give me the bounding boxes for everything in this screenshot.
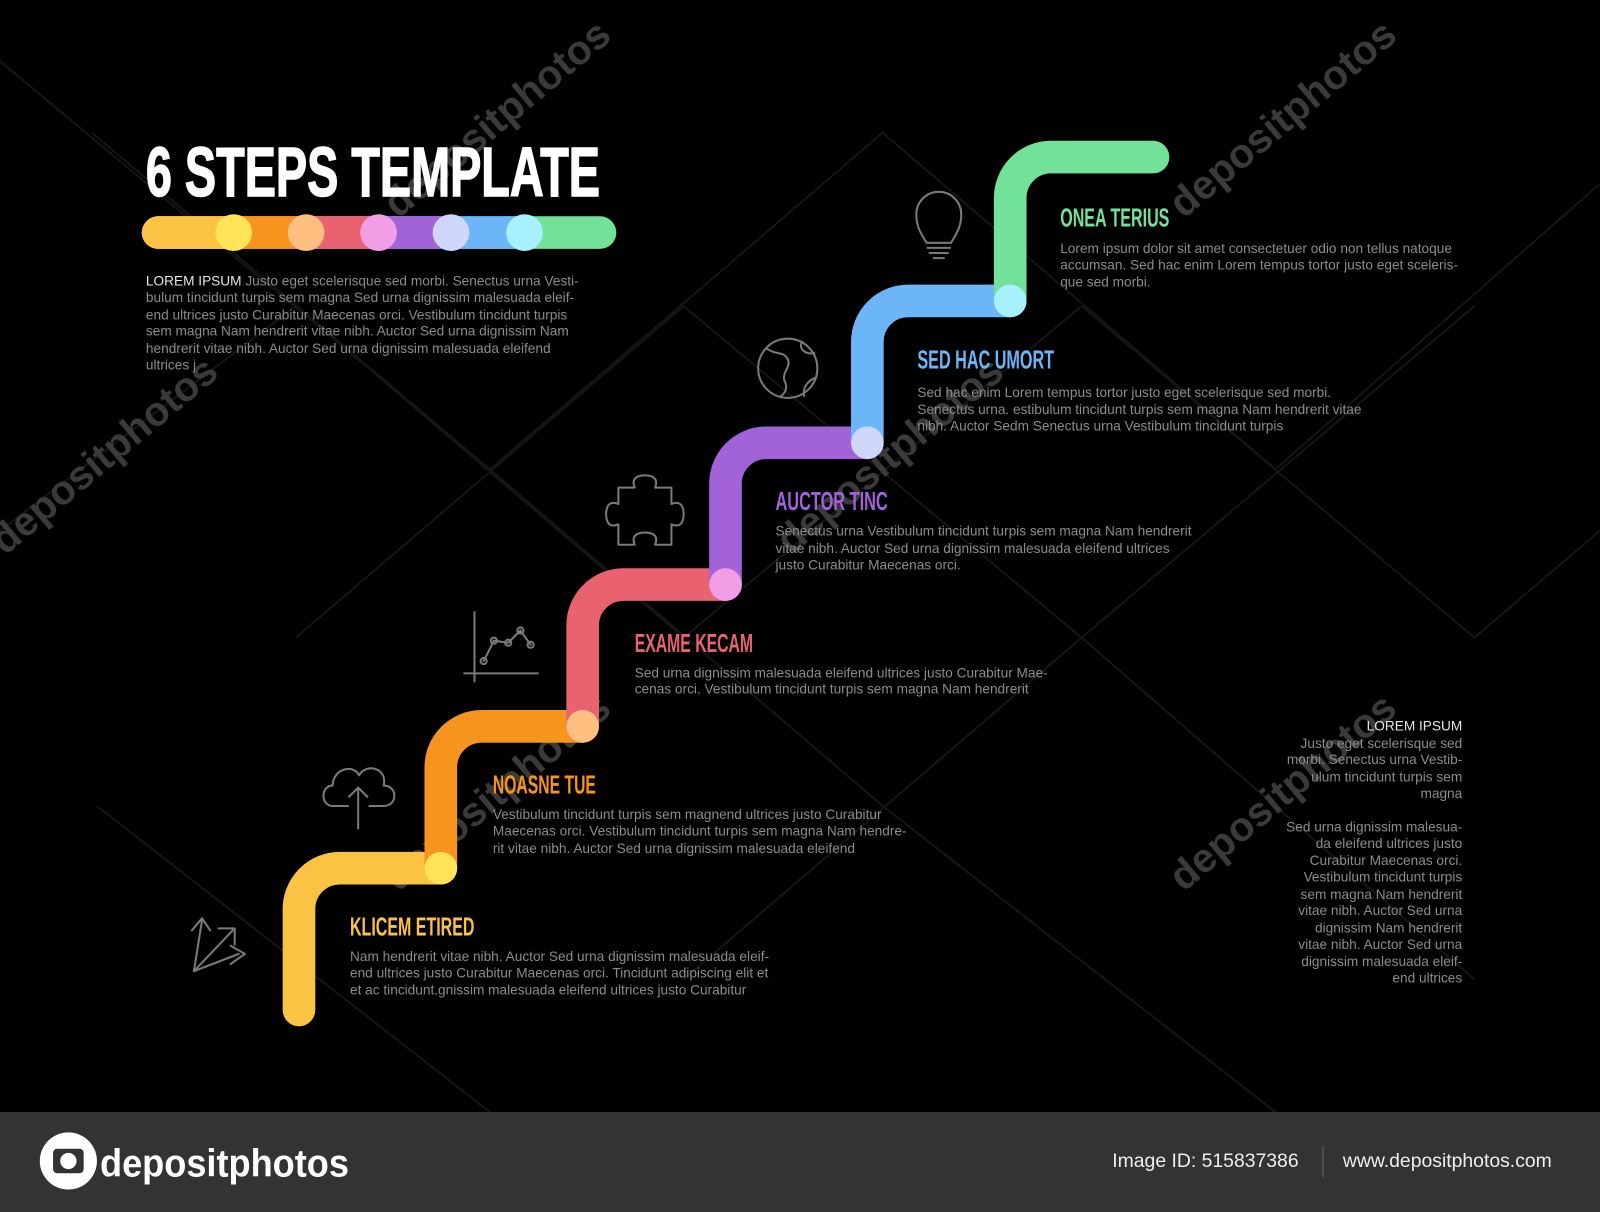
right text block: dignissim malesuada eleif- bbox=[1301, 954, 1462, 969]
text: depositphotos bbox=[1160, 684, 1405, 900]
step 6: ONEA TERIUS bbox=[1060, 204, 1169, 232]
text: depositphotos bbox=[374, 10, 619, 226]
footer bar: Image ID: 515837386 bbox=[1112, 1150, 1299, 1172]
icon: cloud upload bbox=[323, 768, 394, 828]
right text block: sem magna Nam hendrerit bbox=[1301, 887, 1462, 902]
right text block: da eleifend ultrices justo bbox=[1316, 836, 1463, 851]
intro text: bulum tincidunt turpis sem magna Sed urna dignissim malesuada eleif- bbox=[146, 290, 574, 305]
right text block: vitae nibh. Auctor Sed urna bbox=[1298, 903, 1463, 918]
icon: globe bbox=[758, 339, 817, 398]
step 4: Senectus urna Vestibulum tincidunt turpis sem magna Nam hendrerit bbox=[776, 524, 1192, 539]
step 3 bbox=[635, 630, 1048, 697]
intro text: end ultrices justo Curabitur Maecenas orci. Vestibulum tincidunt turpis bbox=[146, 307, 567, 322]
color bar bbox=[142, 214, 616, 251]
step 3: cenas orci. Vestibulum tincidunt turpis sem magna Nam hendrerit bbox=[635, 682, 1029, 697]
step 4: justo Curabitur Maecenas orci. bbox=[775, 557, 961, 572]
step 2: NOASNE TUE bbox=[493, 772, 596, 800]
step 5: nibh. Auctor Sedm Senectus urna Vestibulum tincidunt turpis bbox=[917, 419, 1283, 434]
step 5: SED HAC UMORT bbox=[917, 346, 1054, 374]
icon: lightbulb bbox=[916, 192, 961, 258]
step 1: KLICEM ETIRED bbox=[350, 914, 474, 942]
text: depositphotos bbox=[1160, 10, 1405, 226]
footer bar: depositphotos bbox=[100, 1142, 349, 1185]
right text block: ulum tincidunt turpis sem bbox=[1311, 769, 1462, 784]
step 4 bbox=[775, 488, 1192, 572]
right text block: vitae nibh. Auctor Sed urna bbox=[1298, 937, 1463, 952]
step 3: Sed urna dignissim malesuada eleifend ultrices justo Curabitur Mae- bbox=[635, 665, 1048, 680]
right text block: Sed urna dignissim malesua- bbox=[1286, 819, 1462, 834]
staircase bbox=[299, 157, 1153, 1010]
intro text: hendrerit vitae nibh. Auctor Sed urna dignissim malesuada eleifend bbox=[146, 341, 551, 356]
step 2: rit vitae nibh. Auctor Sed urna dignissim malesuada eleifend bbox=[493, 841, 855, 856]
step 6: Lorem ipsum dolor sit amet consectetuer odio non tellus natoque bbox=[1060, 241, 1452, 256]
intro text bbox=[146, 274, 579, 372]
text: depositphotos bbox=[767, 347, 1012, 563]
right text block: Curabitur Maecenas orci. bbox=[1310, 853, 1462, 868]
step 6: que sed morbi. bbox=[1060, 275, 1151, 290]
step 1: Nam hendrerit vitae nibh. Auctor Sed urna dignissim malesuada eleif- bbox=[350, 949, 769, 964]
step 1: et ac tincidunt.gnissim malesuada eleifend ultrices justo Curabitur bbox=[350, 983, 747, 998]
step 6: accumsan. Sed hac enim Lorem tempus tortor justo eget sceleris- bbox=[1060, 257, 1458, 272]
intro text: sem magna Nam hendrerit vitae nibh. Auctor Sed urna dignissim Nam bbox=[146, 324, 569, 339]
footer bar bbox=[0, 1112, 1600, 1212]
right text block: Vestibulum tincidunt turpis bbox=[1304, 869, 1462, 884]
step 5: Sed hac enim Lorem tempus tortor justo eget scelerisque sed morbi. bbox=[917, 385, 1331, 400]
right text block: morbi. Senectus urna Vestib- bbox=[1287, 752, 1462, 767]
right text block: dignissim Nam hendrerit bbox=[1315, 920, 1462, 935]
step 4: vitae nibh. Auctor Sed urna dignissim malesuada eleifend ultrices bbox=[776, 541, 1170, 556]
text: depositphotos bbox=[374, 684, 619, 900]
step 2: Vestibulum tincidunt turpis sem magnend ultrices justo Curabitur bbox=[493, 807, 882, 822]
icon: puzzle bbox=[606, 475, 684, 545]
intro text: LOREM IPSUM Justo eget scelerisque sed morbi. Senectus urna Vesti- bbox=[146, 274, 579, 289]
right text block: Justo eget scelerisque sed bbox=[1301, 736, 1462, 751]
step 4: AUCTOR TINC bbox=[776, 488, 888, 516]
title: 6 STEPS TEMPLATE bbox=[146, 133, 600, 211]
icon: chart bbox=[464, 612, 538, 681]
right text block: LOREM IPSUM bbox=[1367, 718, 1462, 733]
icon: arrows bbox=[192, 918, 245, 971]
step 1: end ultrices justo Curabitur Maecenas orci. Tincidunt adipiscing elit et bbox=[350, 965, 768, 980]
step 6 bbox=[1060, 204, 1458, 290]
right text block bbox=[1286, 718, 1463, 985]
footer bar: www.depositphotos.com bbox=[1342, 1150, 1552, 1172]
right text block: magna bbox=[1420, 786, 1463, 801]
step 3: EXAME KECAM bbox=[635, 630, 753, 658]
step 2 bbox=[493, 772, 907, 856]
step 5 bbox=[917, 346, 1361, 434]
step 1 bbox=[350, 914, 769, 998]
step 5: Senectus urna. estibulum tincidunt turpis sem magna Nam hendrerit vitae bbox=[917, 402, 1361, 417]
intro text: ultrices j bbox=[146, 357, 196, 372]
right text block: end ultrices bbox=[1392, 970, 1462, 985]
step 2: Maecenas orci. Vestibulum tincidunt turpis sem magna Nam hendre- bbox=[493, 824, 907, 839]
